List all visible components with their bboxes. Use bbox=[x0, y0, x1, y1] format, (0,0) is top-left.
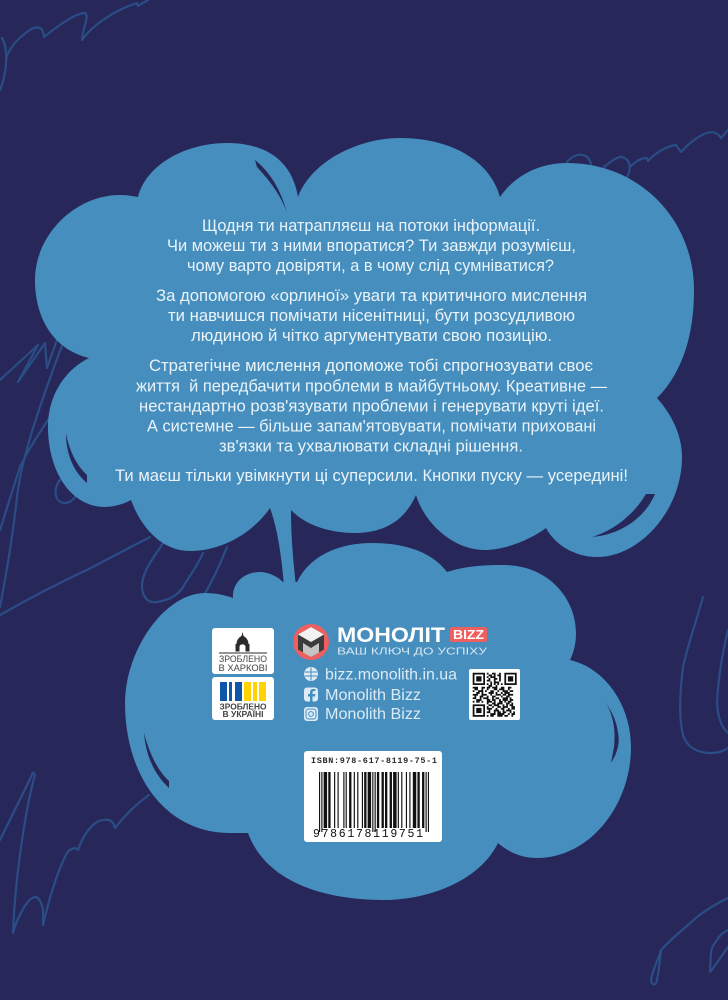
ISBN barcode card: 9786178119751 bbox=[313, 828, 423, 841]
blurb text: Стратегічне мислення допоможе тобі спрогнозувати своє bbox=[149, 357, 593, 375]
top speech cloud bbox=[35, 138, 694, 586]
logo wordmark: ВАШ КЛЮЧ ДО УСПІХУ bbox=[337, 646, 488, 658]
contact links bbox=[304, 666, 457, 723]
icon: instagram bbox=[304, 707, 318, 721]
blurb text: За допомогою «орлиної» уваги та критичного мислення bbox=[156, 287, 587, 305]
icon: website globe bbox=[304, 667, 318, 681]
badge: made in Ukraine: В УКРАЇНІ bbox=[222, 710, 264, 719]
contact links: bizz.monolith.in.ua bbox=[325, 666, 457, 684]
blurb text: Щодня ти натрапляєш на потоки інформації. bbox=[202, 217, 540, 235]
contact links: Monolith Bizz bbox=[325, 706, 421, 723]
QR code bbox=[469, 669, 520, 720]
blurb text: людиною й чітко аргументувати свою позицію. bbox=[191, 327, 552, 345]
logo wordmark: МОНОЛІТ bbox=[337, 624, 445, 647]
blurb text: чому варто довіряти, а в чому слід сумніватися? bbox=[187, 257, 554, 275]
blurb text: ти навчишся помічати нісенітниці, бути розсудливою bbox=[168, 307, 575, 325]
blurb text: Чи можеш ти з ними впоратися? Ти завжди розумієш, bbox=[167, 237, 576, 255]
badge: made in Kharkiv: В ХАРКОВІ bbox=[218, 663, 268, 674]
icon: Kharkiv building bbox=[219, 632, 267, 654]
blurb text: життя й передбачити проблеми в майбутньому. Креативне — bbox=[136, 378, 608, 396]
blurb text: А системне — більше запам'ятовувати, помічати приховані bbox=[147, 418, 596, 436]
icon: facebook bbox=[304, 688, 318, 702]
logo wordmark bbox=[337, 624, 488, 658]
badge: made in Ukraine bbox=[212, 677, 274, 720]
blurb text: Ти маєш тільки увімкнути ці суперсили. Кнопки пуску — усередині! bbox=[115, 467, 628, 485]
badge: made in Kharkiv: ЗРОБЛЕНО bbox=[219, 654, 267, 665]
contact links: Monolith Bizz bbox=[325, 687, 421, 704]
blurb text: нестандартно розв'язувати проблеми і генерувати круті ідеї. bbox=[139, 398, 604, 416]
logo wordmark: BIZZ bbox=[453, 627, 484, 642]
barcode bars bbox=[319, 772, 429, 832]
logo: Monolith cube bbox=[293, 624, 329, 660]
badge: made in Kharkiv bbox=[212, 628, 274, 674]
ISBN barcode card: ISBN:978-617-8119-75-1 bbox=[311, 756, 437, 766]
blurb text bbox=[115, 217, 628, 485]
badge: made in Ukraine: ЗРОБЛЕНО bbox=[220, 702, 267, 712]
bottom cloud bbox=[125, 543, 631, 900]
ISBN barcode card bbox=[304, 751, 442, 842]
blurb text: зв'язки та ухвалювати складні рішення. bbox=[219, 438, 523, 456]
